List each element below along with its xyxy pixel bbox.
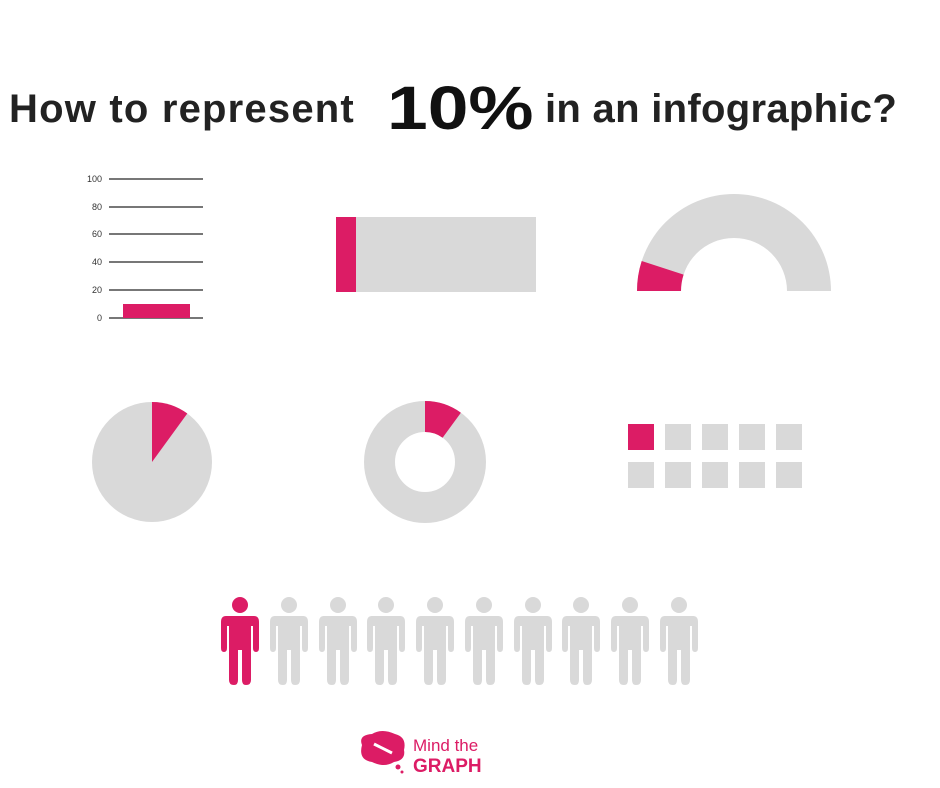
column chart: 60 — [92, 229, 102, 239]
pie — [92, 402, 212, 522]
title — [9, 74, 897, 142]
gauge — [637, 194, 831, 291]
column chart: 40 — [92, 257, 102, 267]
horizontal bar — [336, 217, 536, 292]
logo: Mind the — [413, 736, 478, 755]
column chart: 20 — [92, 285, 102, 295]
logo — [361, 731, 482, 777]
donut — [380, 401, 470, 508]
column chart — [87, 174, 203, 323]
title: How to represent — [9, 87, 355, 131]
logo: GRAPH — [413, 756, 482, 777]
square grid — [628, 424, 802, 488]
column chart: 0 — [97, 313, 102, 323]
title: in an infographic? — [545, 87, 897, 131]
people row — [221, 597, 698, 685]
column chart: 80 — [92, 202, 102, 212]
column chart: 100 — [87, 174, 102, 184]
title: 10% — [387, 74, 534, 142]
